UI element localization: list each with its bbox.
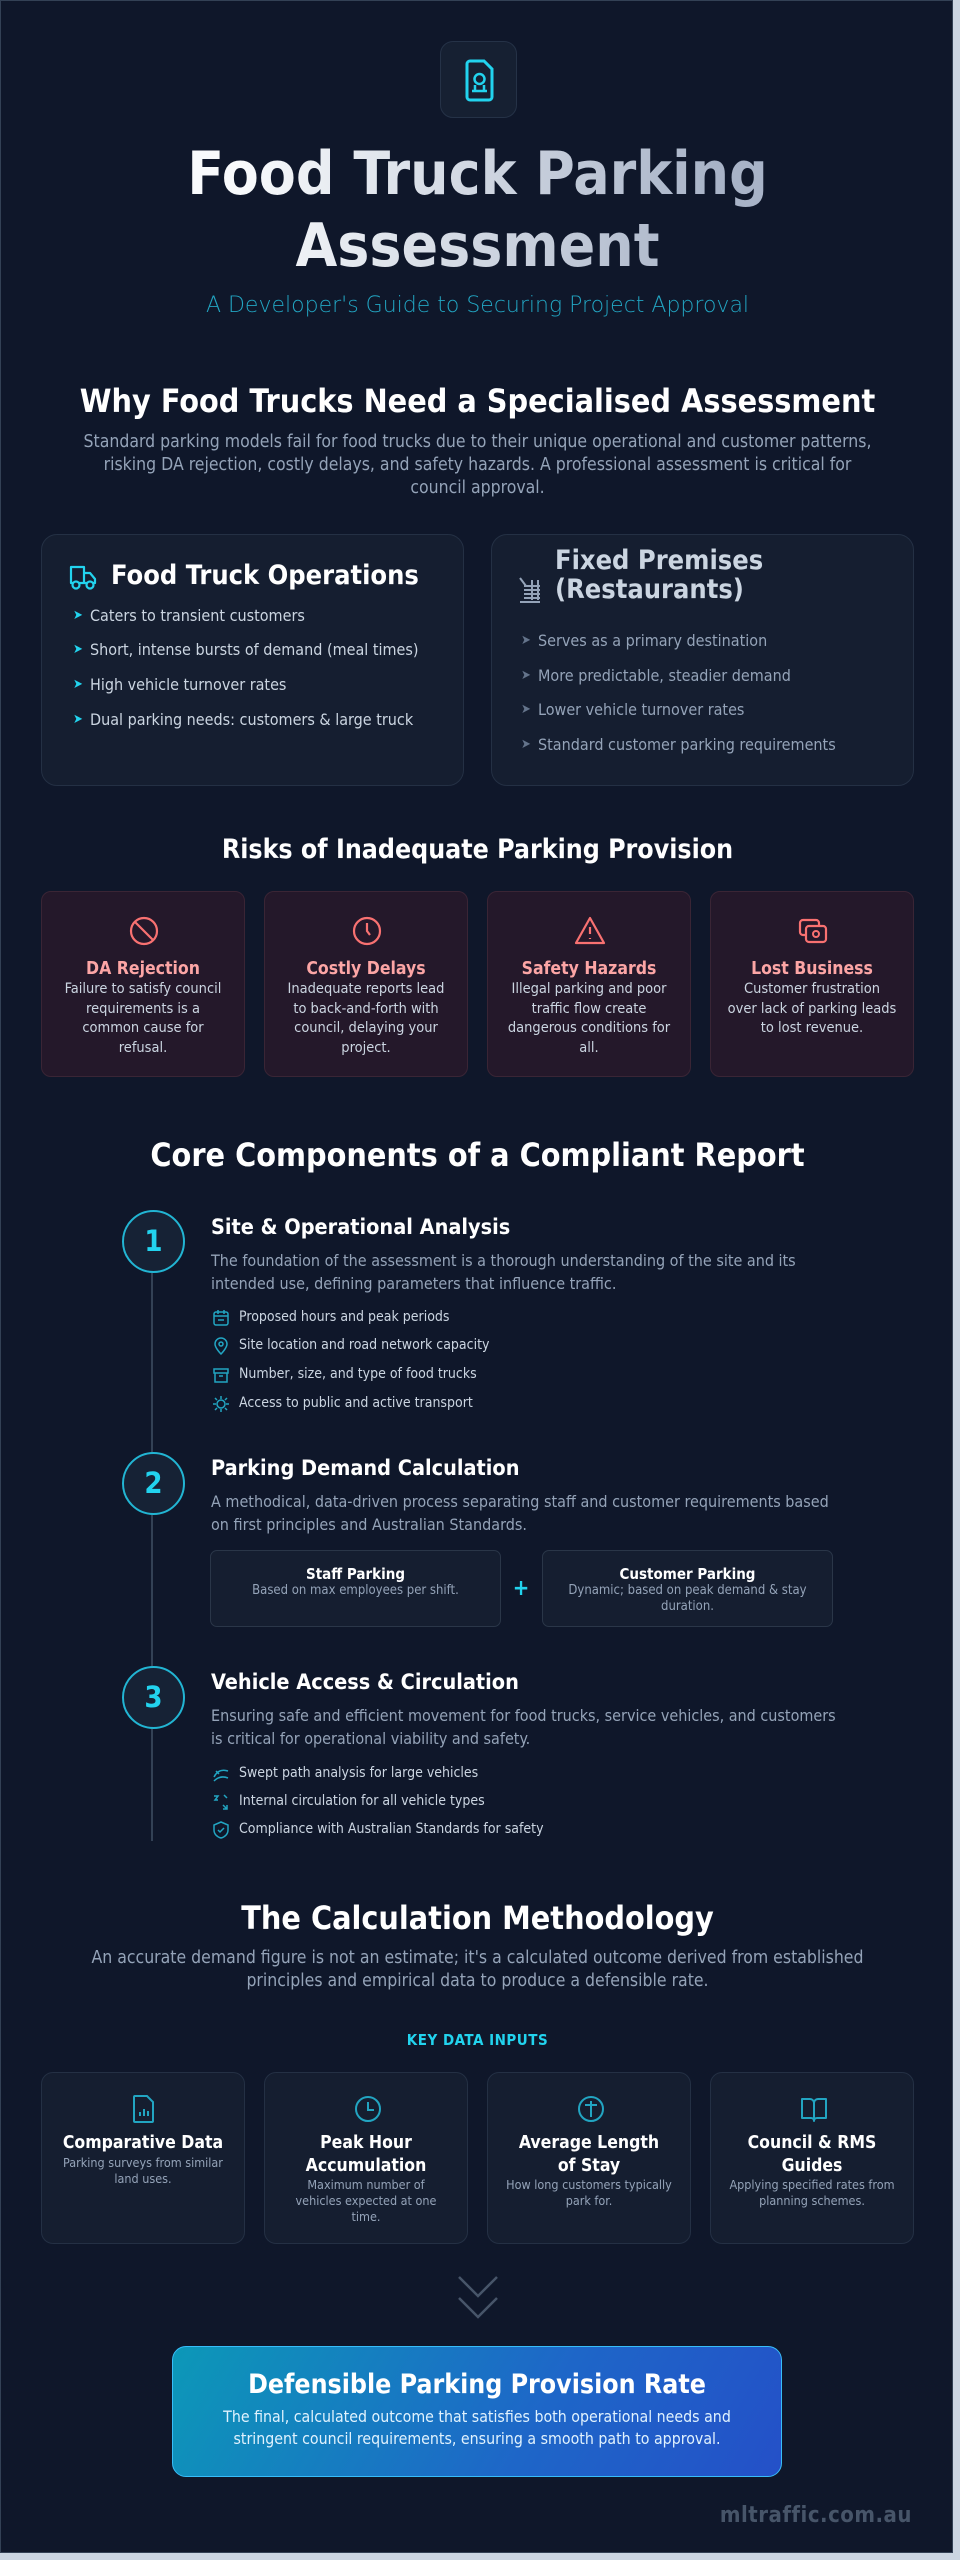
box: staff parking: Staff Parking bbox=[306, 1565, 405, 1583]
panel: fixed premises: ➤ bbox=[521, 668, 531, 683]
callout: defensible parking provision rate bbox=[172, 2346, 782, 2477]
footer: brand: mltraffic.com.au bbox=[720, 2503, 912, 2528]
panel: food truck operations bbox=[41, 534, 464, 786]
panel: risk costly delays bbox=[264, 891, 468, 1077]
step number 2 bbox=[122, 1452, 185, 1515]
card: council & RMS guides: Guides bbox=[782, 2156, 842, 2176]
text: why intro: Standard parking models fail for food trucks due to their unique operational and customer patterns, bbox=[84, 432, 871, 452]
step 1 list: Access to public and active transport bbox=[239, 1395, 473, 1411]
step 2 title: Parking Demand Calculation bbox=[211, 1456, 519, 1481]
panel: risk DA rejection: Failure to satisfy council bbox=[65, 981, 221, 997]
text: why intro bbox=[84, 432, 871, 498]
bullets bbox=[521, 631, 836, 754]
card: average length of stay: Average Length bbox=[519, 2133, 659, 2153]
step 3 list: Swept path analysis for large vehicles bbox=[239, 1765, 478, 1781]
step 3 description: is critical for operational viability and safety. bbox=[211, 1728, 530, 1748]
step 1 title: Site & Operational Analysis bbox=[211, 1215, 510, 1240]
callout: defensible parking provision rate: stringent council requirements, ensuring a smooth path to approval. bbox=[233, 2429, 720, 2448]
card: average length of stay: park for. bbox=[566, 2193, 612, 2208]
panel: fixed premises bbox=[491, 534, 914, 786]
step 1 description: intended use, defining parameters that influence traffic. bbox=[211, 1274, 616, 1292]
card: comparative data: Parking surveys from similar bbox=[63, 2155, 223, 2170]
icon: header document bbox=[440, 41, 517, 118]
plus sign: + bbox=[513, 1576, 529, 1601]
text: methodology intro: principles and empirical data to produce a defensible rate. bbox=[246, 1971, 709, 1991]
bullets: Serves as a primary destination bbox=[538, 631, 767, 650]
panel: food truck operations: ➤ bbox=[73, 608, 83, 623]
step number 1 bbox=[122, 1210, 185, 1273]
step 1 list bbox=[213, 1309, 489, 1412]
heading: Fixed Premises bbox=[555, 545, 763, 576]
icon: truck bbox=[70, 566, 96, 590]
step number 3: 3 bbox=[144, 1680, 163, 1714]
subtitle: A Developer's Guide to Securing Project Approval bbox=[206, 293, 749, 318]
panel: risk DA rejection: common cause for bbox=[82, 1020, 204, 1036]
step 3 title: Vehicle Access & Circulation bbox=[211, 1670, 519, 1695]
heading: risks: Risks of Inadequate Parking Provision bbox=[222, 834, 733, 865]
callout: defensible parking provision rate: The final, calculated outcome that satisfies both operational needs and bbox=[223, 2407, 731, 2426]
panel: risk lost business bbox=[710, 891, 914, 1077]
panel: risk costly delays: project. bbox=[341, 1040, 391, 1056]
bullets: Short, intense bursts of demand (meal times) bbox=[90, 640, 418, 659]
step 3 list bbox=[213, 1765, 544, 1839]
card: council & RMS guides bbox=[710, 2072, 914, 2244]
step 1 list: Proposed hours and peak periods bbox=[239, 1309, 450, 1325]
card: peak hour accumulation bbox=[264, 2072, 468, 2244]
step number 1: 1 bbox=[144, 1224, 163, 1258]
label: key data inputs: KEY DATA INPUTS bbox=[407, 2031, 548, 2049]
card: average length of stay bbox=[487, 2072, 691, 2244]
step 1 list: Site location and road network capacity bbox=[239, 1337, 489, 1353]
callout: defensible parking provision rate: Defensible Parking Provision Rate bbox=[248, 2369, 706, 2400]
heading: (Restaurants) bbox=[555, 574, 744, 605]
card: average length of stay: How long customers typically bbox=[506, 2177, 672, 2192]
panel: risk safety hazards: all. bbox=[579, 1040, 599, 1056]
card: council & RMS guides: planning schemes. bbox=[759, 2193, 865, 2208]
panel: risk lost business: to lost revenue. bbox=[761, 1020, 863, 1036]
card: comparative data: land uses. bbox=[114, 2171, 172, 2186]
step number 2: 2 bbox=[144, 1466, 163, 1500]
icon: restaurant bbox=[519, 577, 540, 603]
panel: risk safety hazards bbox=[487, 891, 691, 1077]
panel: fixed premises: ➤ bbox=[521, 737, 531, 752]
bullets: More predictable, steadier demand bbox=[538, 666, 791, 685]
text: why intro: council approval. bbox=[410, 478, 545, 498]
panel: food truck operations: ➤ bbox=[73, 712, 83, 727]
panel: food truck operations: ➤ bbox=[73, 677, 83, 692]
panel: risk lost business: Lost Business bbox=[751, 959, 873, 979]
panel: food truck operations: ➤ bbox=[73, 642, 83, 657]
panel: risk costly delays: Inadequate reports lead bbox=[288, 981, 444, 997]
panel: risk safety hazards: traffic flow create bbox=[532, 1000, 646, 1016]
title: Food Truck Parking bbox=[187, 139, 768, 209]
step 3 list: Internal circulation for all vehicle types bbox=[239, 1793, 485, 1809]
box: staff parking: Based on max employees per shift. bbox=[252, 1583, 459, 1598]
bullets: High vehicle turnover rates bbox=[90, 675, 286, 694]
card: council & RMS guides: Applying specified rates from bbox=[729, 2177, 895, 2192]
card: comparative data bbox=[41, 2072, 245, 2244]
text: why intro: risking DA rejection, costly delays, and safety hazards. A professional assessment is critical for bbox=[104, 455, 851, 475]
panel: risk DA rejection: DA Rejection bbox=[86, 959, 200, 979]
card: peak hour accumulation: Accumulation bbox=[306, 2156, 426, 2176]
card: peak hour accumulation: vehicles expected at one bbox=[296, 2193, 436, 2208]
title bbox=[1, 138, 954, 282]
card: comparative data: Comparative Data bbox=[63, 2133, 223, 2153]
panel: risk DA rejection bbox=[41, 891, 245, 1077]
bullets bbox=[73, 606, 418, 729]
panel: risk DA rejection: requirements is a bbox=[86, 1000, 200, 1016]
text: methodology intro bbox=[92, 1948, 864, 1991]
card: peak hour accumulation: Maximum number of bbox=[307, 2177, 425, 2192]
heading bbox=[555, 545, 763, 605]
card: average length of stay: of Stay bbox=[558, 2156, 620, 2176]
title: Assessment bbox=[295, 211, 660, 281]
step 1 list: Number, size, and type of food trucks bbox=[239, 1366, 477, 1382]
box: customer parking: duration. bbox=[661, 1599, 714, 1614]
card: peak hour accumulation: Peak Hour bbox=[320, 2133, 412, 2153]
arrow: double chevron down bbox=[458, 2276, 498, 2318]
panel: fixed premises: ➤ bbox=[521, 633, 531, 648]
panel: risk costly delays: Costly Delays bbox=[306, 959, 426, 979]
box: customer parking bbox=[542, 1550, 833, 1627]
panel: fixed premises: ➤ bbox=[521, 702, 531, 717]
panel: risk safety hazards: Safety Hazards bbox=[522, 959, 656, 979]
heading: calculation methodology: The Calculation Methodology bbox=[241, 1899, 714, 1937]
bullets: Lower vehicle turnover rates bbox=[538, 700, 744, 719]
step 3 description bbox=[211, 1706, 836, 1748]
box: customer parking: Dynamic; based on peak demand & stay bbox=[568, 1583, 807, 1598]
panel: risk DA rejection: refusal. bbox=[119, 1040, 167, 1056]
panel: risk safety hazards: dangerous conditions for bbox=[508, 1020, 670, 1036]
heading: why: Why Food Trucks Need a Specialised Assessment bbox=[80, 382, 875, 420]
text: methodology intro: An accurate demand figure is not an estimate; it's a calculated outcome derived from established bbox=[92, 1948, 864, 1968]
step 1 description: The foundation of the assessment is a thorough understanding of the site and its bbox=[211, 1251, 796, 1270]
box: staff parking bbox=[210, 1550, 501, 1627]
step 2 description: on first principles and Australian Standards. bbox=[211, 1514, 527, 1534]
panel: risk lost business: Customer frustration bbox=[744, 981, 880, 997]
panel: risk lost business: over lack of parking leads bbox=[728, 1000, 896, 1016]
step number 3 bbox=[122, 1666, 185, 1729]
bullets: Caters to transient customers bbox=[90, 606, 305, 625]
step 2 description: A methodical, data-driven process separating staff and customer requirements based bbox=[211, 1492, 829, 1511]
card: council & RMS guides: Council & RMS bbox=[748, 2133, 876, 2153]
heading: Food Truck Operations bbox=[111, 560, 419, 591]
box: customer parking: Customer Parking bbox=[620, 1565, 755, 1583]
card: peak hour accumulation: time. bbox=[352, 2209, 380, 2224]
panel: risk costly delays: to back-and-forth with bbox=[293, 1000, 439, 1016]
heading: core components: Core Components of a Compliant Report bbox=[150, 1136, 805, 1174]
panel: risk safety hazards: Illegal parking and poor bbox=[512, 981, 666, 997]
bullets: Standard customer parking requirements bbox=[538, 735, 836, 754]
step 3 list: Compliance with Australian Standards for safety bbox=[239, 1821, 544, 1837]
step 3 description: Ensuring safe and efficient movement for food trucks, service vehicles, and customers bbox=[211, 1706, 836, 1725]
step 1 description bbox=[210, 1251, 796, 1292]
bullets: Dual parking needs: customers & large truck bbox=[90, 710, 413, 729]
step 2 description bbox=[211, 1492, 829, 1534]
timeline line bbox=[151, 1273, 153, 1841]
panel: risk costly delays: council, delaying your bbox=[294, 1020, 438, 1036]
